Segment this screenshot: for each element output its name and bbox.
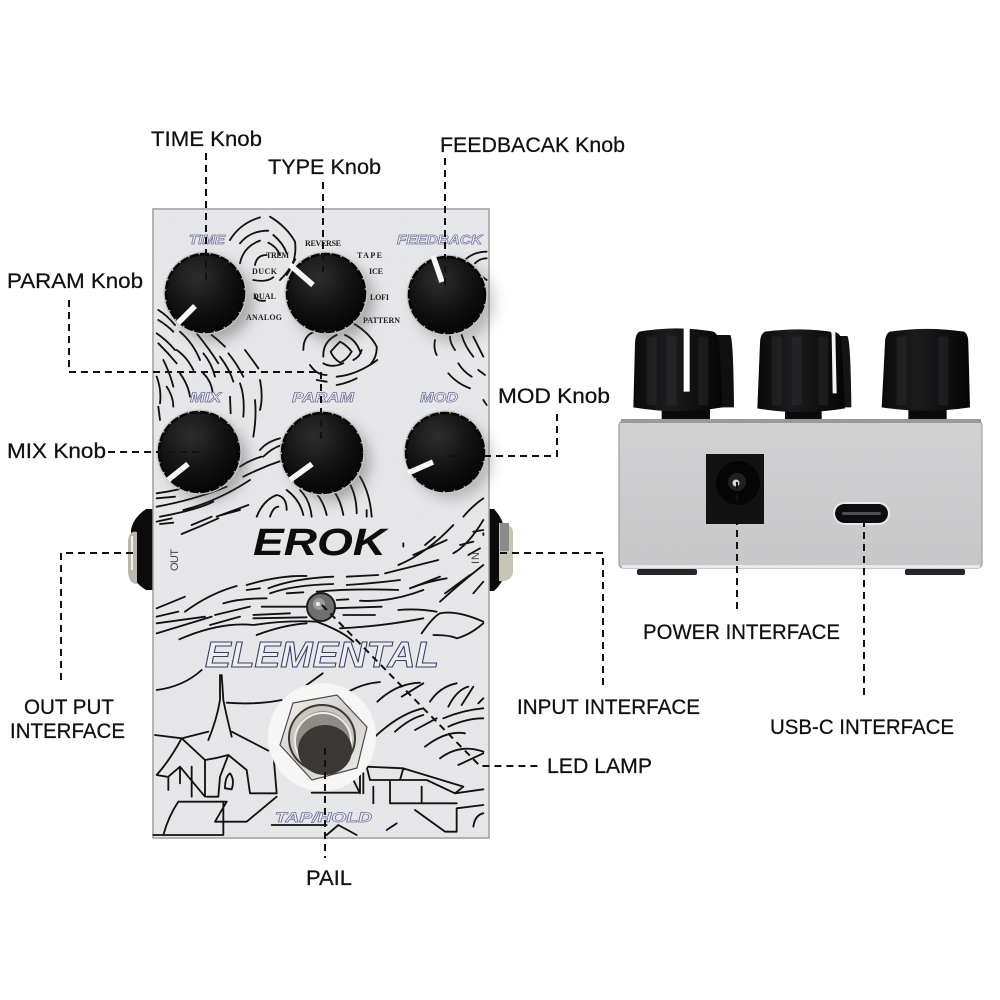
out label: OUT (169, 549, 181, 571)
label: MIX Knob: MIX Knob (7, 440, 106, 463)
pedal enclosure (153, 209, 489, 838)
label: POWER INTERFACE: POWER INTERFACE (643, 621, 840, 644)
knob ribs right (902, 337, 943, 405)
front knob left (633, 328, 723, 411)
indicator middle (827, 328, 837, 393)
delay type scale labels: TAPE (357, 251, 382, 260)
leader: MIX (108, 451, 201, 453)
label: USB-C INTERFACE: USB-C INTERFACE (770, 716, 954, 739)
side enclosure (619, 421, 982, 568)
leader: LED (322, 605, 540, 766)
bottom edge (622, 565, 980, 568)
knob: TIME (164, 252, 253, 341)
line art: sky swirls and knob area (157, 217, 487, 517)
power jack (706, 454, 764, 524)
leader: footswitch (324, 748, 326, 858)
front knob middle (757, 329, 845, 412)
leader: MOD (448, 413, 557, 456)
knob: FEEDBACK (407, 255, 494, 342)
knob: TYPE (285, 252, 374, 341)
output jack (128, 509, 156, 590)
foot right (905, 569, 965, 575)
TIME label: TIME (189, 232, 225, 247)
top edge strip (621, 419, 981, 423)
USB-C port (833, 502, 890, 525)
label: FEEDBACAK Knob: FEEDBACAK Knob (440, 134, 625, 157)
label: TIME Knob: TIME Knob (151, 128, 262, 151)
product name: ELEMENTAL (205, 634, 439, 675)
knob: PARAM (280, 411, 370, 501)
leader: output (61, 553, 135, 680)
label: PAIL: PAIL (306, 867, 352, 890)
delay type scale labels: DUCK (252, 267, 278, 276)
footswitch (268, 683, 376, 791)
label: LED LAMP: LED LAMP (547, 755, 652, 778)
delay type scale labels: DUAL (253, 292, 276, 301)
label: OUT PUT INTERFACE: INTERFACE (10, 720, 125, 743)
leader: TYPE (322, 182, 324, 272)
delay type scale labels: LOFI (370, 293, 389, 302)
delay type scale labels: TREM (266, 251, 289, 260)
delay type scale labels: ANALOG (246, 313, 282, 322)
side knobs (633, 327, 970, 419)
delay type scale labels: REVERSE (305, 239, 341, 248)
front knob right (882, 329, 970, 411)
line art: flowing night sky (153, 510, 483, 835)
leader: PARAM (69, 300, 321, 443)
FEEDBACK label: FEEDBACK (397, 232, 484, 247)
tap hold label: TAP/HOLD (275, 809, 372, 825)
label: TYPE Knob: TYPE Knob (268, 156, 381, 179)
MIX label: MIX (190, 389, 223, 405)
leader: TIME (205, 153, 207, 285)
delay type scale labels (246, 239, 400, 325)
delay type scale labels: PATTERN (363, 316, 400, 325)
label: PARAM Knob: PARAM Knob (7, 270, 143, 293)
MOD label: MOD (420, 389, 458, 405)
label: INPUT INTERFACE: INPUT INTERFACE (517, 696, 700, 719)
leader: FEEDBACK (444, 158, 446, 290)
leader: USB-C (863, 520, 865, 697)
label: MOD Knob: MOD Knob (498, 385, 610, 408)
input jack (486, 509, 513, 591)
leader: input (500, 553, 603, 690)
foot left (637, 569, 697, 575)
knob ribs left (652, 337, 703, 405)
knob: MIX (157, 410, 247, 500)
brand logo: EROK (253, 522, 389, 564)
delay type scale labels: ICE (369, 267, 383, 276)
back knob middle (837, 336, 851, 407)
knob ribs middle (777, 337, 823, 405)
in label: IN (470, 552, 482, 564)
shafts (662, 408, 947, 419)
PARAM label: PARAM (292, 389, 354, 405)
panel: pedal top view (128, 209, 513, 838)
panel: pedal side view (619, 327, 982, 575)
leader: power (736, 482, 738, 612)
label: OUT PUT INTERFACE (10, 696, 125, 743)
indicator left (684, 327, 690, 392)
back knob left (717, 335, 734, 407)
LED lamp (307, 593, 335, 621)
knob: MOD (404, 411, 492, 499)
label: OUT PUT INTERFACE: OUT PUT (24, 696, 114, 719)
